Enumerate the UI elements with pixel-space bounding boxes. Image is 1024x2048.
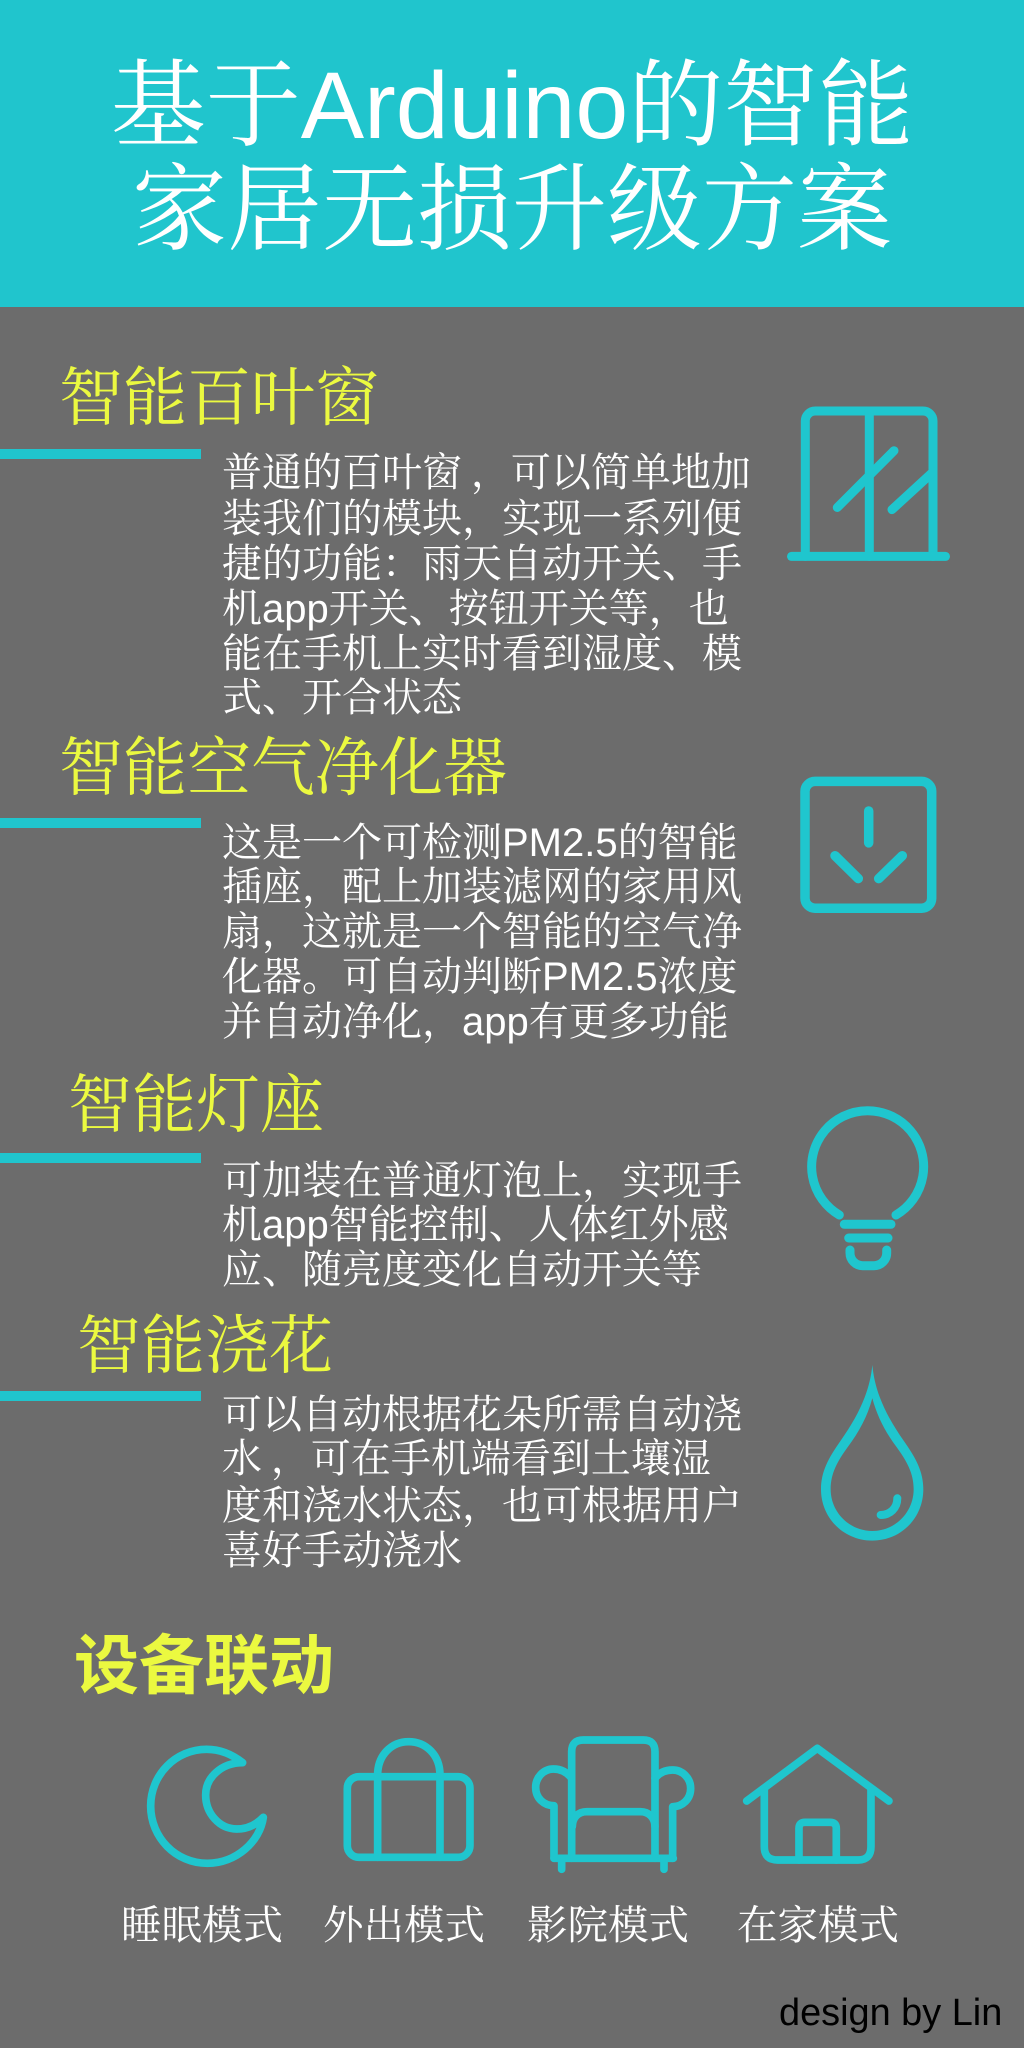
text: smart lamp holder: 机app智能控制、人体红外感	[222, 1203, 729, 1247]
heading: smart blinds: 智能百叶窗	[59, 362, 379, 434]
label: cinema mode: 影院模式	[527, 1902, 689, 1948]
heading: smart air purifier: 智能空气净化器	[59, 732, 507, 804]
text: smart air purifier: 扇，这就是一个智能的空气净	[222, 910, 742, 954]
credit: design by Lin	[779, 1992, 1002, 2034]
text: smart air purifier: 这是一个可检测PM2.5的智能	[222, 820, 738, 864]
title: 家居无损升级方案	[132, 156, 892, 262]
text: smart watering: 水 ，可在手机端看到土壤湿	[222, 1437, 711, 1481]
header banner	[0, 0, 1024, 307]
divider bar: smart air purifier	[0, 818, 201, 828]
text: smart air purifier: 并自动净化，app有更多功能	[222, 1000, 729, 1044]
title: 基于Arduino的智能	[111, 52, 913, 158]
label: home mode: 在家模式	[737, 1902, 899, 1948]
text: smart air purifier: 插座，配上加装滤网的家用风	[222, 865, 742, 909]
text: smart air purifier	[222, 820, 742, 1044]
text: smart lamp holder: 应、随亮度变化自动开关等	[222, 1248, 702, 1292]
text: smart blinds	[222, 450, 751, 720]
heading: smart watering: 智能浇花	[77, 1310, 333, 1382]
heading: smart lamp holder: 智能灯座	[68, 1069, 324, 1141]
divider bar: smart watering	[0, 1391, 201, 1401]
text: smart watering	[222, 1392, 742, 1573]
text: smart air purifier: 化器。可自动判断PM2.5浓度	[222, 955, 738, 999]
text: smart lamp holder	[222, 1158, 742, 1292]
text: smart watering: 喜好手动浇水	[222, 1529, 462, 1573]
divider bar: smart blinds	[0, 449, 201, 459]
label: away mode: 外出模式	[323, 1902, 485, 1948]
text: smart blinds: 装我们的模块，实现一系列便	[222, 497, 742, 541]
text: smart blinds: 普通的百叶窗 ，可以简单地加	[222, 450, 751, 494]
text: smart blinds: 捷的功能：雨天自动开关、手	[222, 542, 742, 586]
label: sleep mode: 睡眠模式	[121, 1902, 283, 1948]
heading: device linkage: 设备联动	[74, 1629, 334, 1702]
title	[111, 52, 913, 262]
divider bar: smart lamp holder	[0, 1153, 201, 1163]
text: smart blinds: 式、开合状态	[222, 676, 462, 720]
text: smart blinds: 能在手机上实时看到湿度、模	[222, 632, 742, 676]
text: smart lamp holder: 可加装在普通灯泡上，实现手	[222, 1158, 742, 1202]
text: smart blinds: 机app开关、按钮开关等，也	[222, 587, 729, 631]
text: smart watering: 度和浇水状态，也可根据用户	[222, 1484, 742, 1528]
text: smart watering: 可以自动根据花朵所需自动浇	[222, 1392, 742, 1436]
